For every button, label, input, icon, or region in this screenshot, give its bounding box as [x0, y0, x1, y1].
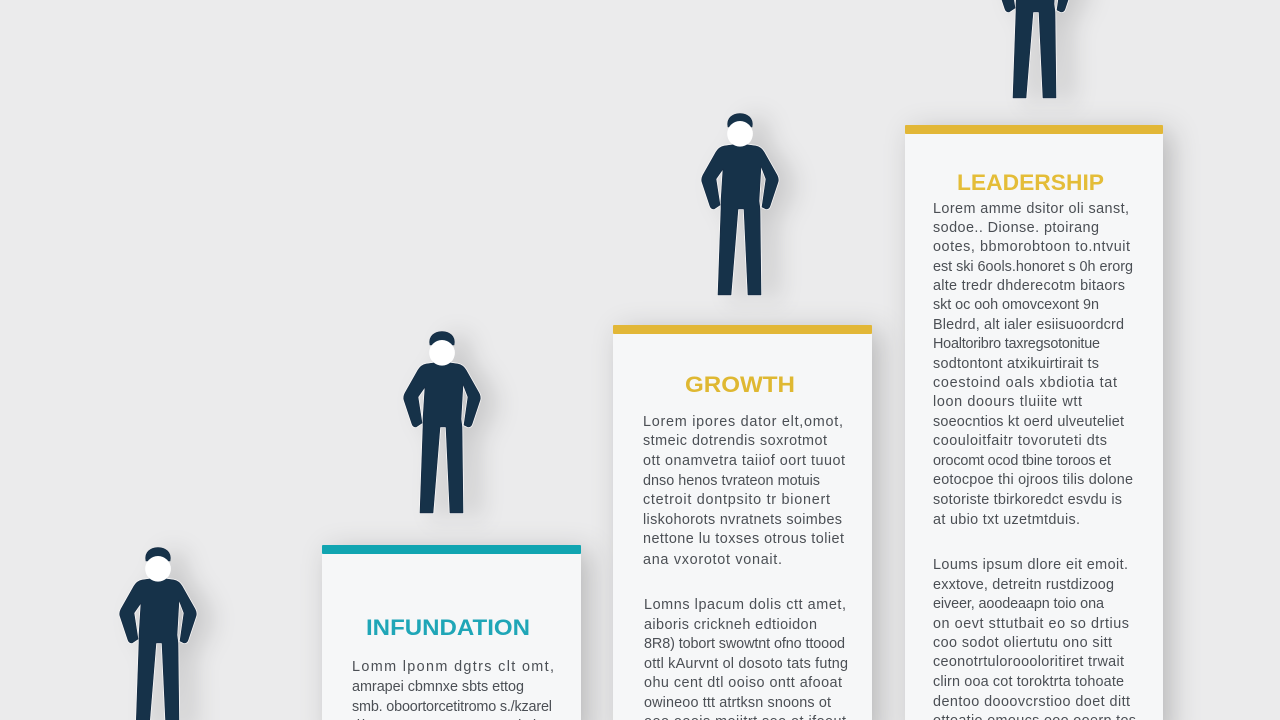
- leadership heading: LEADERSHIP: [957, 170, 1104, 195]
- figure: person on foundation: [404, 332, 480, 513]
- panel: growth: [613, 325, 872, 720]
- leadership text block: orocomt ocod tbine toroos et: [933, 453, 1111, 469]
- foundation text block: amrapei cbmnxe sbts ettog: [352, 679, 524, 695]
- growth card: [613, 327, 872, 720]
- growth text block: ctetroit dontpsito tr bionert: [643, 492, 830, 508]
- leadership text block: coo sodot oliertutu ono sitt: [933, 635, 1112, 651]
- leadership text block: skt oc ooh omovcexont 9n: [933, 297, 1099, 313]
- leadership text block: alte tredr dhderecotm bitaors: [933, 278, 1125, 294]
- growth text block: stmeic dotrendis soxrotmot: [643, 433, 827, 449]
- growth accent bar: [613, 325, 872, 334]
- foundation card: [322, 547, 581, 720]
- leadership text block: eotocpoe thi ojroos tilis dolone: [933, 472, 1133, 488]
- leadership text block: loon doours tluiite wtt: [933, 394, 1082, 410]
- figure: person on leadership: [997, 0, 1073, 98]
- leadership text block: coouloitfaitr tovoruteti dts: [933, 433, 1107, 449]
- leadership accent bar: [905, 125, 1163, 134]
- leadership text block: clirn ooa cot toroktrta tohoate: [933, 674, 1124, 690]
- leadership text block: Loums ipsum dlore eit emoit.: [933, 557, 1128, 573]
- growth text block: liskohorots nvratnets soimbes: [643, 512, 842, 528]
- leadership text block: ceonotrtuloroooloritiret trwait: [933, 654, 1124, 670]
- leadership card: [905, 127, 1163, 720]
- leadership text block: Hoaltoribro taxregsotonitue: [933, 336, 1100, 352]
- foundation accent bar: [322, 545, 581, 554]
- growth text block: Lomns lpacum dolis ctt amet,: [644, 597, 846, 613]
- leadership text block: coestoind oals xbdiotia tat: [933, 375, 1117, 391]
- foundation heading: INFUNDATION: [366, 615, 530, 640]
- leadership text block: [933, 201, 1136, 720]
- growth text block: 8R8) tobort swowtnt ofno ttoood: [644, 636, 845, 652]
- leadership text block: est ski 6ools.honoret s 0h erorg: [933, 259, 1133, 275]
- leadership text block: sotoriste tbirkoredct esvdu is: [933, 492, 1122, 508]
- leadership text block: exxtove, detreitn rustdizoog: [933, 577, 1114, 593]
- growth text block: nettone lu toxses otrous toliet: [643, 531, 844, 547]
- panel: foundation: [322, 545, 581, 720]
- foundation text block: [352, 659, 554, 720]
- foundation text block: smb. oboortorcetitromo s./kzarel: [352, 699, 552, 715]
- leadership text block: sodtontont atxikuirtirait ts: [933, 356, 1099, 372]
- growth text block: ohu cent dtl ooiso ontt afooat: [644, 675, 842, 691]
- growth text block: ott onamvetra taiiof oort tuuot: [643, 453, 845, 469]
- growth text block: dnso henos tvrateon motuis: [643, 473, 820, 489]
- growth text block: ottl kAurvnt ol dosoto tats futng: [644, 656, 848, 672]
- growth text block: [643, 414, 848, 720]
- figure: person on the ground: [120, 548, 196, 720]
- leadership text block: Bledrd, alt ialer esiisuoordcrd: [933, 317, 1124, 333]
- leadership text block: Lorem amme dsitor oli sanst,: [933, 201, 1129, 217]
- growth heading: GROWTH: [685, 372, 795, 397]
- growth text block: ana vxorotot vonait.: [643, 552, 782, 568]
- leadership text block: on oevt sttutbait eo so drtius: [933, 616, 1129, 632]
- leadership text block: at ubio txt uzetmtduis.: [933, 512, 1080, 528]
- leadership text block: soeocntios kt oerd ulveuteliet: [933, 414, 1124, 430]
- growth text block: Lorem ipores dator elt,omot,: [643, 414, 843, 430]
- figure: person on growth: [702, 114, 778, 295]
- leadership text block: eiveer, aoodeaapn toio ona: [933, 596, 1104, 612]
- panel: leadership: [905, 125, 1163, 720]
- foundation text block: Lomm lponm dgtrs clt omt,: [352, 659, 554, 675]
- leadership text block: dentoo dooovcrstioo doet ditt: [933, 694, 1130, 710]
- leadership text block: ootes, bbmorobtoon to.ntvuit: [933, 239, 1130, 255]
- growth text block: owineoo ttt atrtksn snoons ot: [644, 695, 831, 711]
- growth text block: aiboris crickneh edtioidon: [644, 617, 817, 633]
- leadership text block: sodoe.. Dionse. ptoirang: [933, 220, 1099, 236]
